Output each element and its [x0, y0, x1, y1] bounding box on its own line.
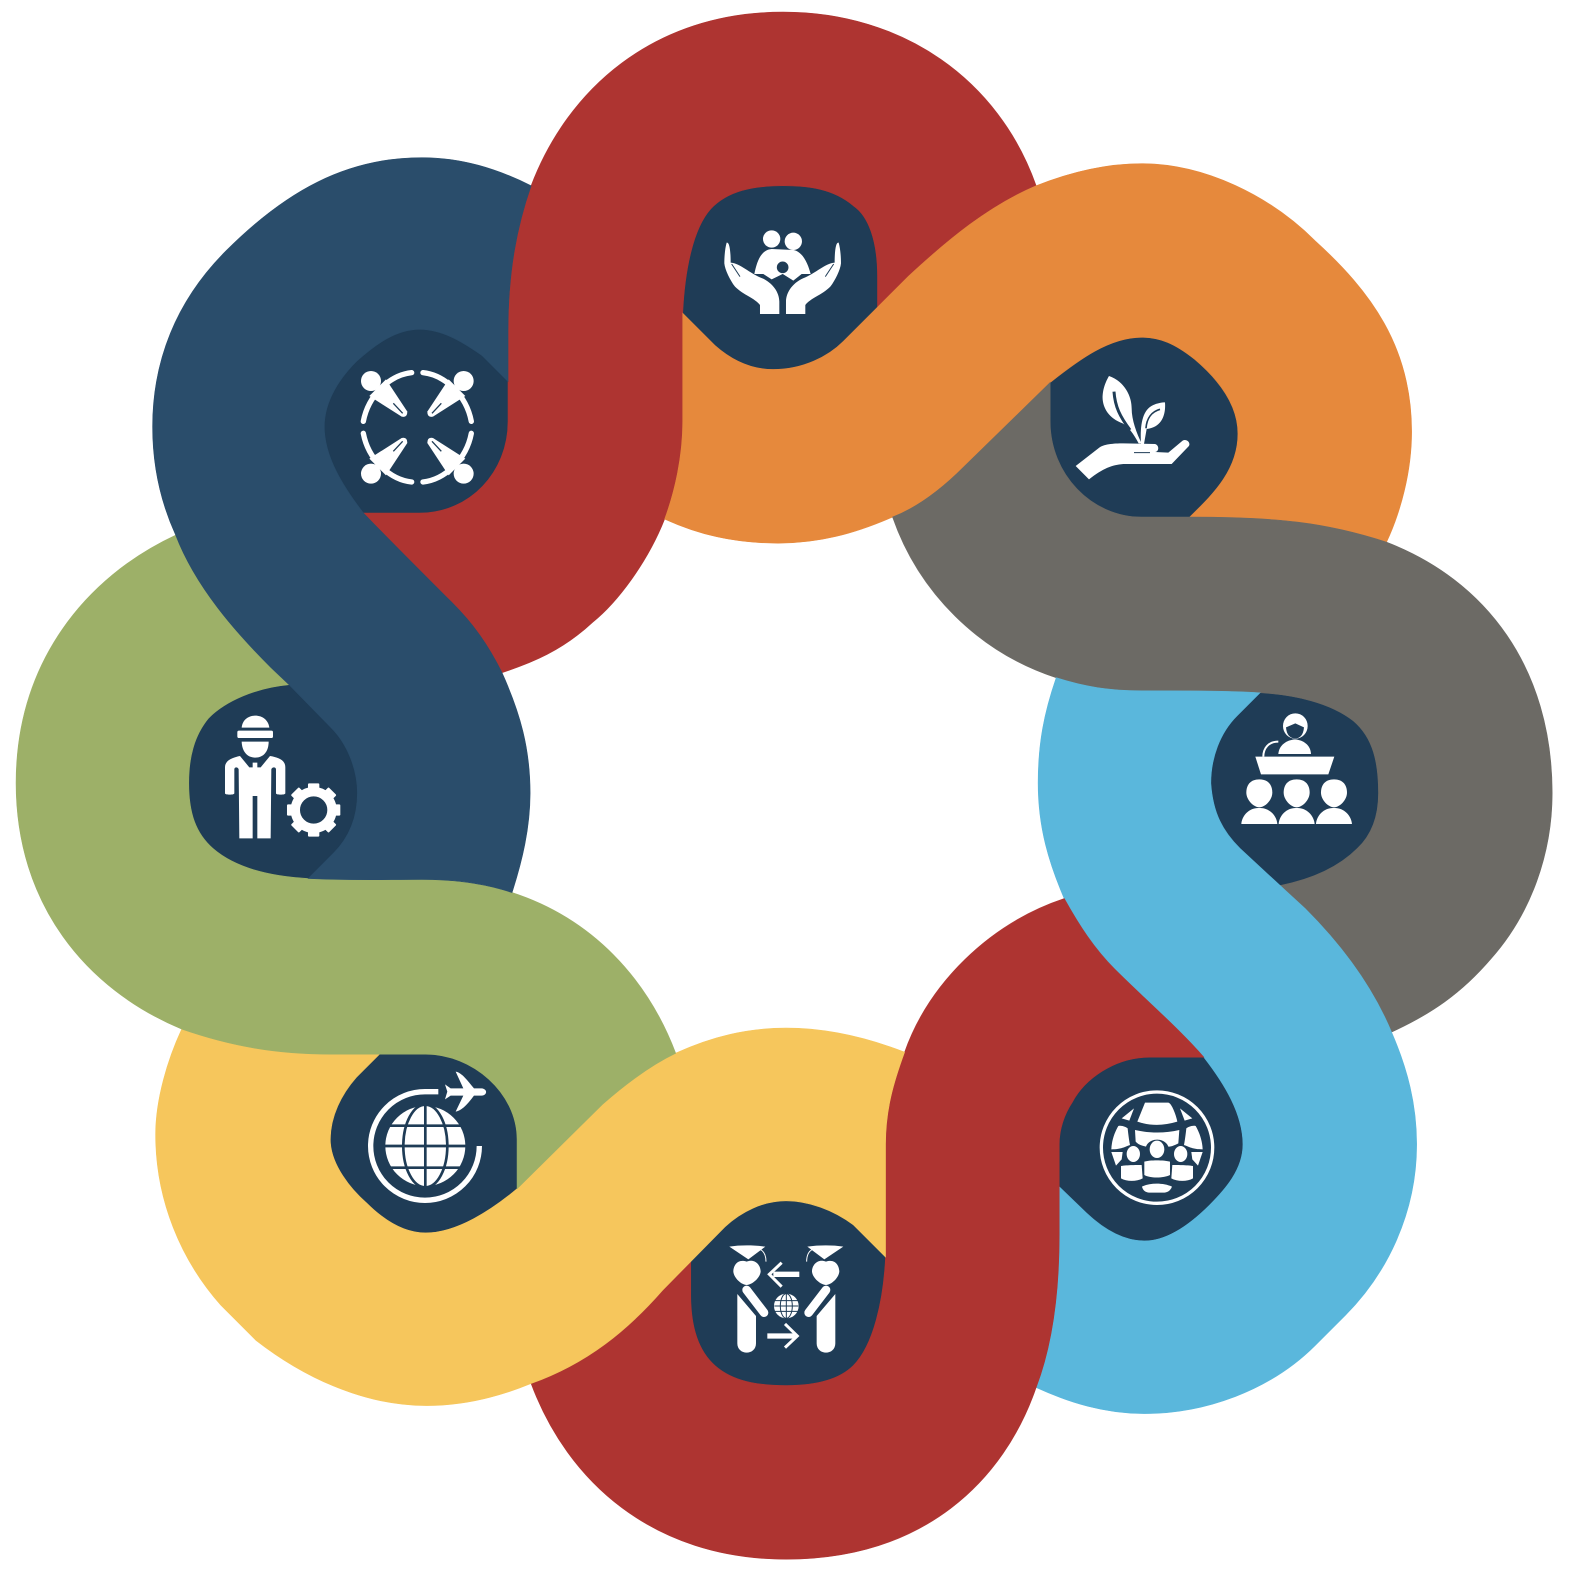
band: gray — [893, 383, 1552, 1032]
band: red top — [363, 12, 1036, 673]
icon badges background — [189, 186, 1378, 1386]
icon: exchange students with globe — [729, 1245, 843, 1353]
icon: speaker at podium with audience — [1241, 713, 1352, 824]
icon: plant in hand — [1076, 376, 1189, 479]
band: red bottom — [531, 899, 1204, 1559]
icon: globe with people — [1101, 1092, 1213, 1203]
band: yellow — [156, 1028, 905, 1406]
icon: four people in a circle — [361, 371, 474, 484]
band: light blue — [1036, 678, 1417, 1414]
icon: globe with airplane — [371, 1072, 486, 1200]
band: orange — [665, 164, 1412, 543]
band: green — [16, 535, 676, 1189]
icon: family in caring hands — [724, 230, 841, 314]
icon: engineer with gear — [225, 716, 340, 838]
band: navy — [153, 158, 531, 893]
